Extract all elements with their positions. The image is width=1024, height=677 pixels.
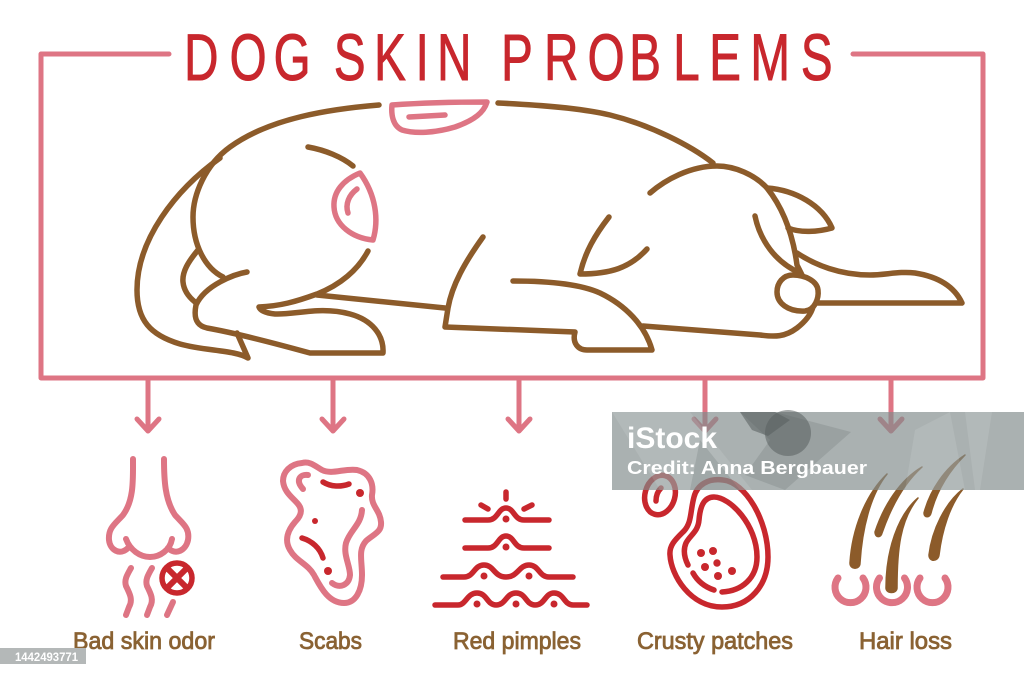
icon: red pimples xyxy=(435,492,587,608)
frame xyxy=(41,54,983,378)
label: hair loss: Hair loss xyxy=(859,628,952,655)
wound on back xyxy=(392,102,487,132)
icon: bad skin odor xyxy=(109,459,192,615)
icon: crusty patches xyxy=(640,472,768,607)
arrows xyxy=(137,380,902,431)
label: crusty patches: Crusty patches xyxy=(637,628,793,655)
image id tag: 1442493771 xyxy=(15,650,78,664)
watermark band xyxy=(612,410,1024,490)
label: scabs: Scabs xyxy=(299,628,362,655)
icon: hair loss xyxy=(835,455,965,603)
dog illustration xyxy=(137,103,962,358)
label: red pimples: Red pimples xyxy=(453,628,581,655)
watermark credit: Credit: Anna Bergbauer xyxy=(627,458,867,478)
title: DOG SKIN PROBLEMS xyxy=(184,21,833,95)
icon: scabs xyxy=(283,463,381,603)
label: bad skin odor: Bad skin odor xyxy=(73,628,215,655)
watermark logo: iStock xyxy=(627,422,717,455)
image id tag xyxy=(0,648,86,664)
wound on flank xyxy=(334,173,376,240)
